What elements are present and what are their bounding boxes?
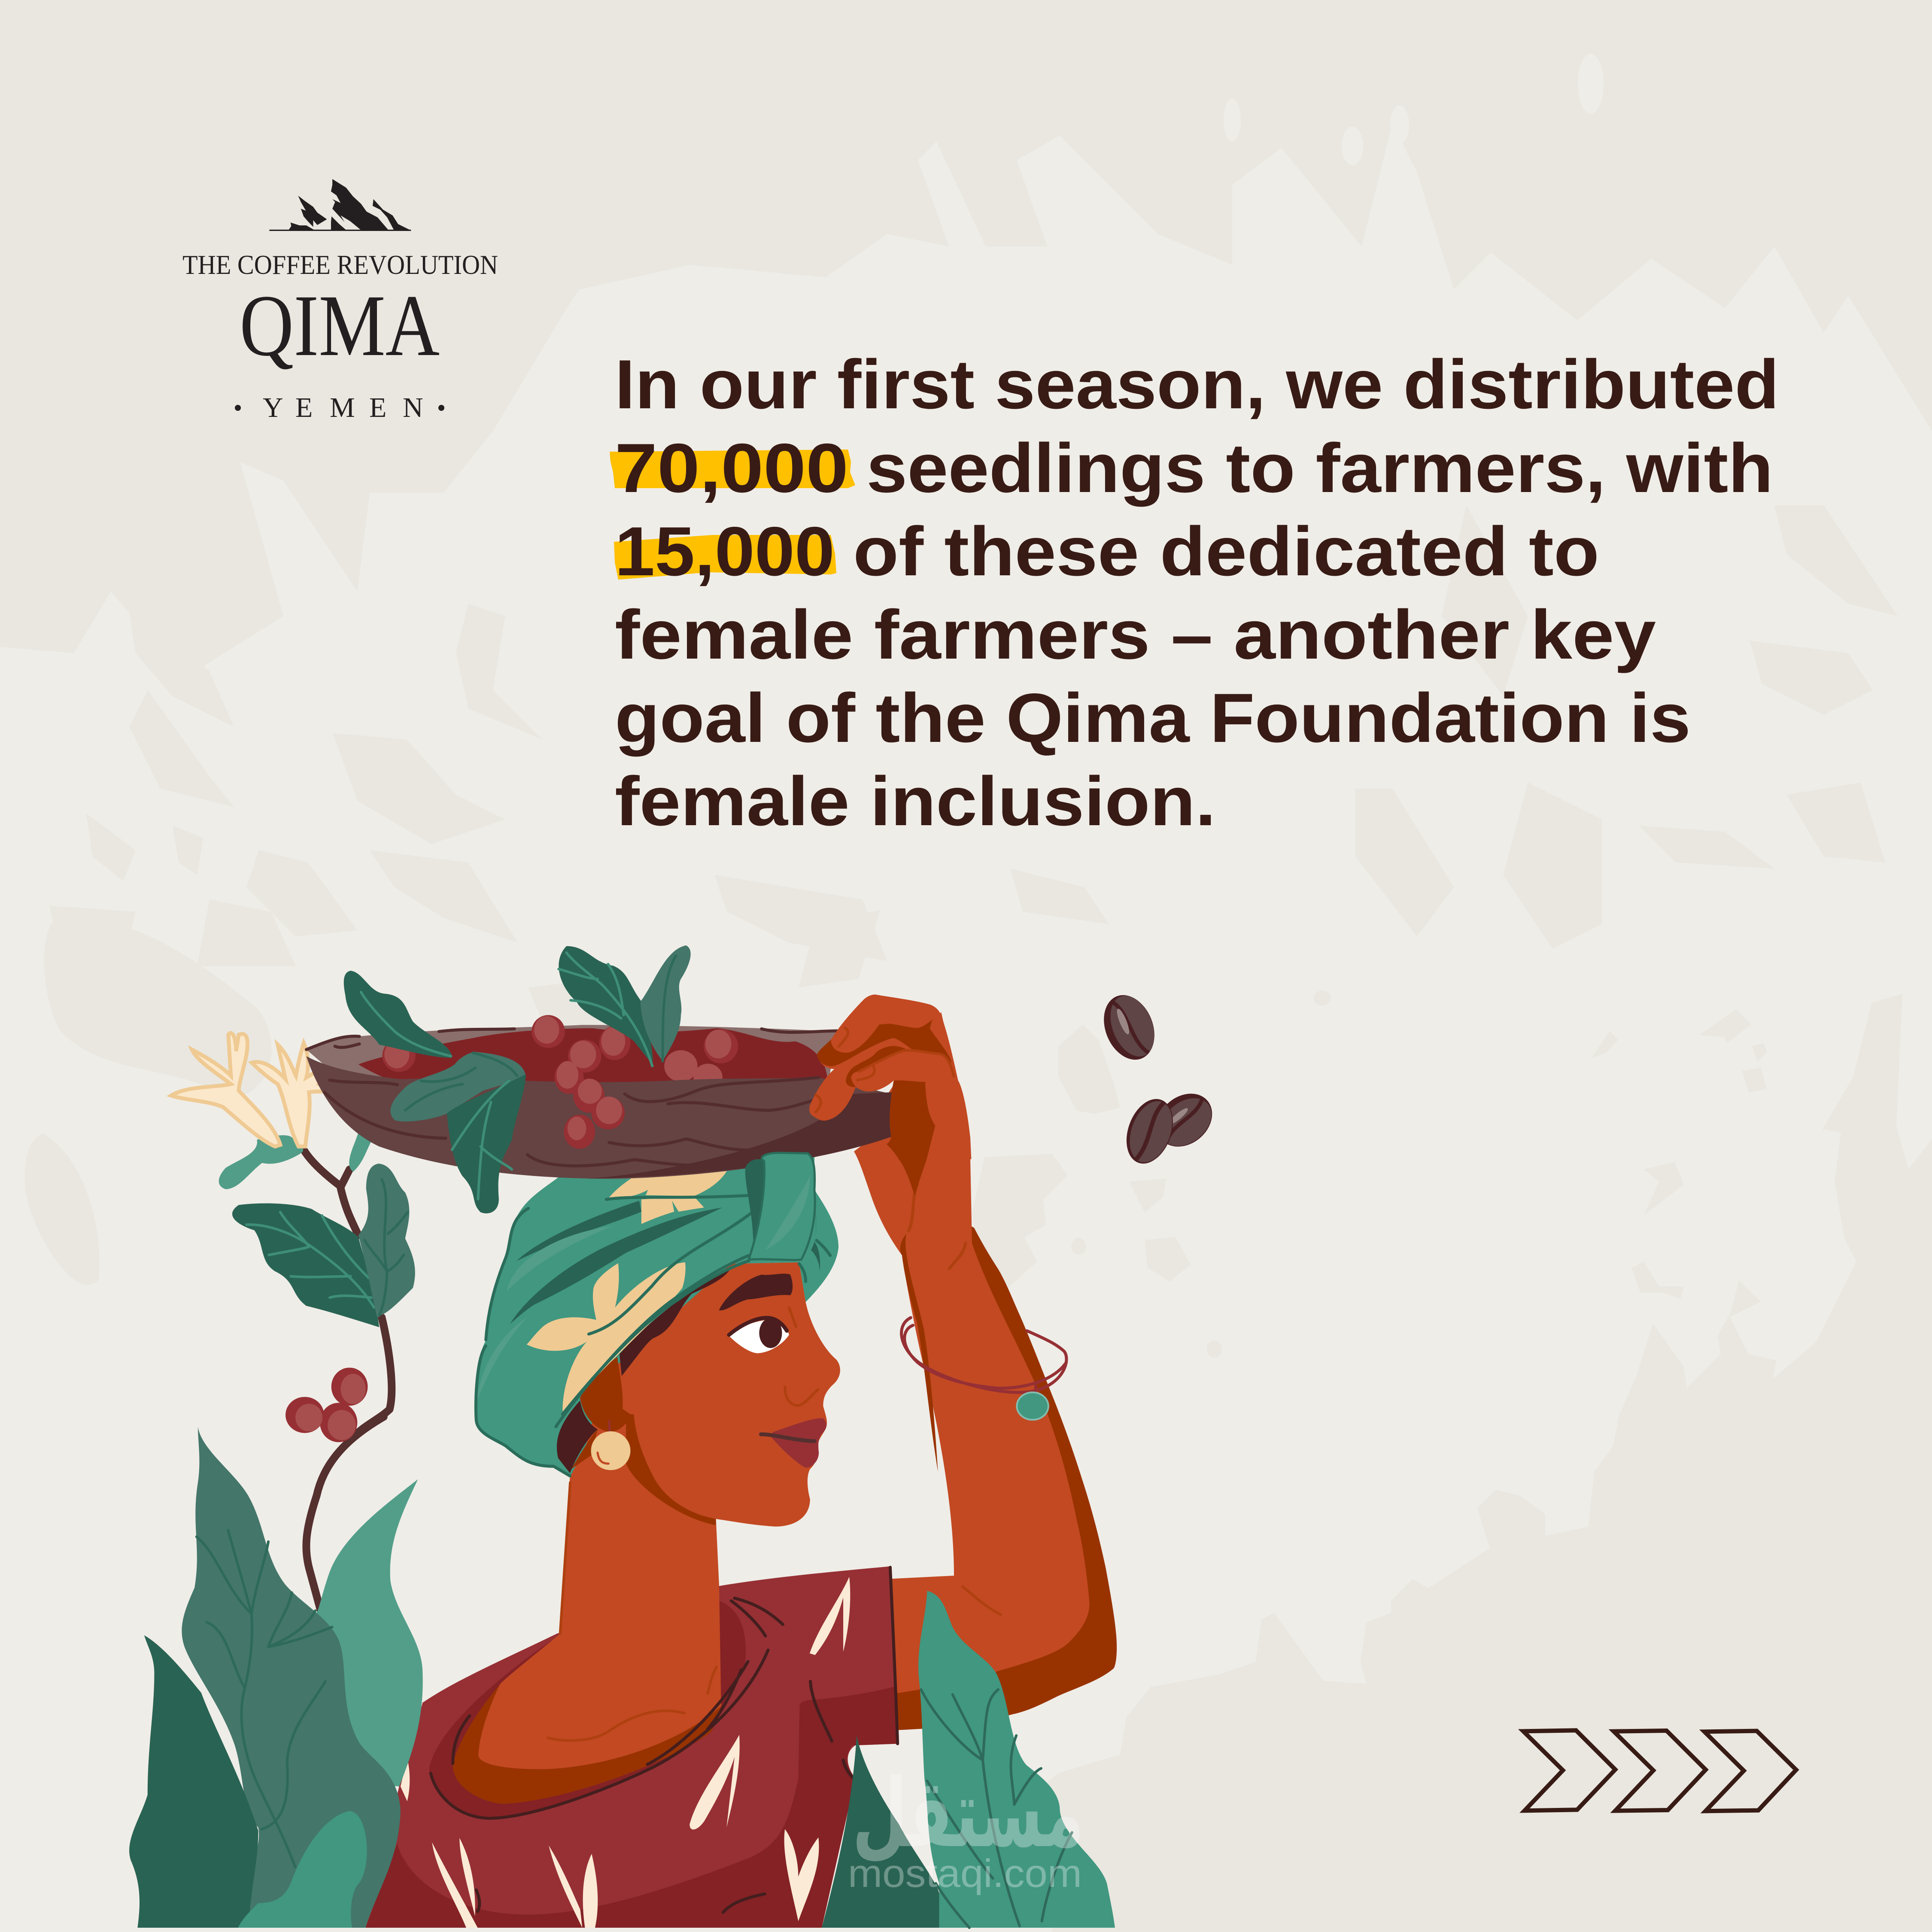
watermark URL: mostaqi.com [848, 1852, 1082, 1896]
face features [591, 1274, 826, 1470]
lower right darker marble [972, 990, 1932, 1932]
lower stem [306, 1417, 384, 1611]
mid-left marble blotches [24, 910, 880, 1285]
light specks on upper marble [1224, 54, 1604, 165]
hair [620, 1269, 730, 1376]
logo wordmark: QIMA [240, 277, 440, 374]
branch berries [286, 1367, 368, 1442]
headline text: female inclusion. [615, 762, 1216, 840]
bowl wood grain [307, 1029, 837, 1166]
arrows: next chevrons [1523, 1730, 1796, 1811]
shirt [366, 1566, 898, 1928]
lips [771, 1418, 826, 1468]
bowl of coffee cherries [307, 945, 892, 1213]
headline text: of these dedicated to [853, 513, 1599, 590]
bowl leaves [344, 971, 452, 1058]
right arm shadow [876, 1225, 1117, 1731]
bean right [1146, 1083, 1223, 1157]
headline text: goal of the Qima Foundation is [615, 679, 1691, 757]
bracelet [902, 1318, 1066, 1397]
watermark: mostaqi [848, 1759, 1084, 1896]
bean left [1118, 1093, 1182, 1170]
logo: Qima Yemen [182, 179, 498, 423]
flower sepal [219, 1135, 303, 1189]
illustration: woman carrying coffee bowl with plants [129, 945, 1117, 1928]
upper darker marble [0, 0, 1932, 966]
headline text [615, 346, 1779, 840]
neck and face [571, 1262, 840, 1549]
branch leaves [232, 1203, 379, 1327]
highlight: 70,000 [610, 450, 855, 488]
headline text: seedlings to farmers, with [866, 429, 1773, 507]
coffee branch with berries and flower [171, 1033, 415, 1611]
finger lines [816, 1028, 954, 1112]
flower petals [171, 1033, 280, 1146]
cherries [382, 1015, 738, 1149]
upper stem [304, 1150, 392, 1437]
hand over bowl [809, 995, 971, 1196]
light leaf [309, 1479, 423, 1786]
headline text: female farmers – another key [615, 596, 1656, 674]
forearm shading and creases [900, 1184, 1066, 1472]
eye [728, 1320, 789, 1353]
shirt streaks [401, 1577, 850, 1928]
turban [475, 1154, 838, 1476]
turban pattern [527, 1171, 727, 1412]
turban knot [745, 1153, 820, 1272]
headline text: 15,000 [615, 513, 835, 590]
right arm skin [854, 1012, 1089, 1693]
pendant [1017, 1392, 1048, 1420]
right front dark leaf [822, 1735, 939, 1928]
eyebrow [719, 1274, 793, 1310]
cherries behind rim [664, 1050, 723, 1091]
jaw shadow [626, 1414, 716, 1525]
neck and shoulder skin [478, 1466, 721, 1769]
front plant leaves [129, 1427, 1115, 1928]
wrist shadow [887, 1080, 935, 1196]
earring [608, 1421, 611, 1432]
mid leaf [182, 1427, 401, 1928]
logo tagline: THE COFFEE REVOLUTION [182, 249, 498, 280]
right front green leaf [918, 1591, 1115, 1928]
small green leaf [238, 1811, 367, 1928]
logo country line: YEMEN [263, 392, 423, 423]
dark leaf [129, 1635, 258, 1928]
shirt fold lines [431, 1567, 898, 1912]
bean top [1095, 987, 1163, 1067]
icon: mountain mark [269, 179, 411, 231]
highlight: 15,000 [614, 535, 836, 580]
icon: coffee beans [1095, 987, 1223, 1170]
watermark Arabic wordmark: مستقل [852, 1759, 1084, 1868]
woman [129, 945, 1117, 1928]
headline text: 70,000 [615, 429, 848, 507]
neck and shoulder skin shadow [453, 1685, 721, 1804]
bowl interior [307, 1025, 837, 1094]
headline text: In our first season, we distributed [615, 346, 1779, 423]
bowl front [307, 1056, 892, 1179]
cherries mass [358, 1028, 828, 1094]
finger shadows [817, 1020, 952, 1066]
nose lines [785, 1307, 818, 1406]
